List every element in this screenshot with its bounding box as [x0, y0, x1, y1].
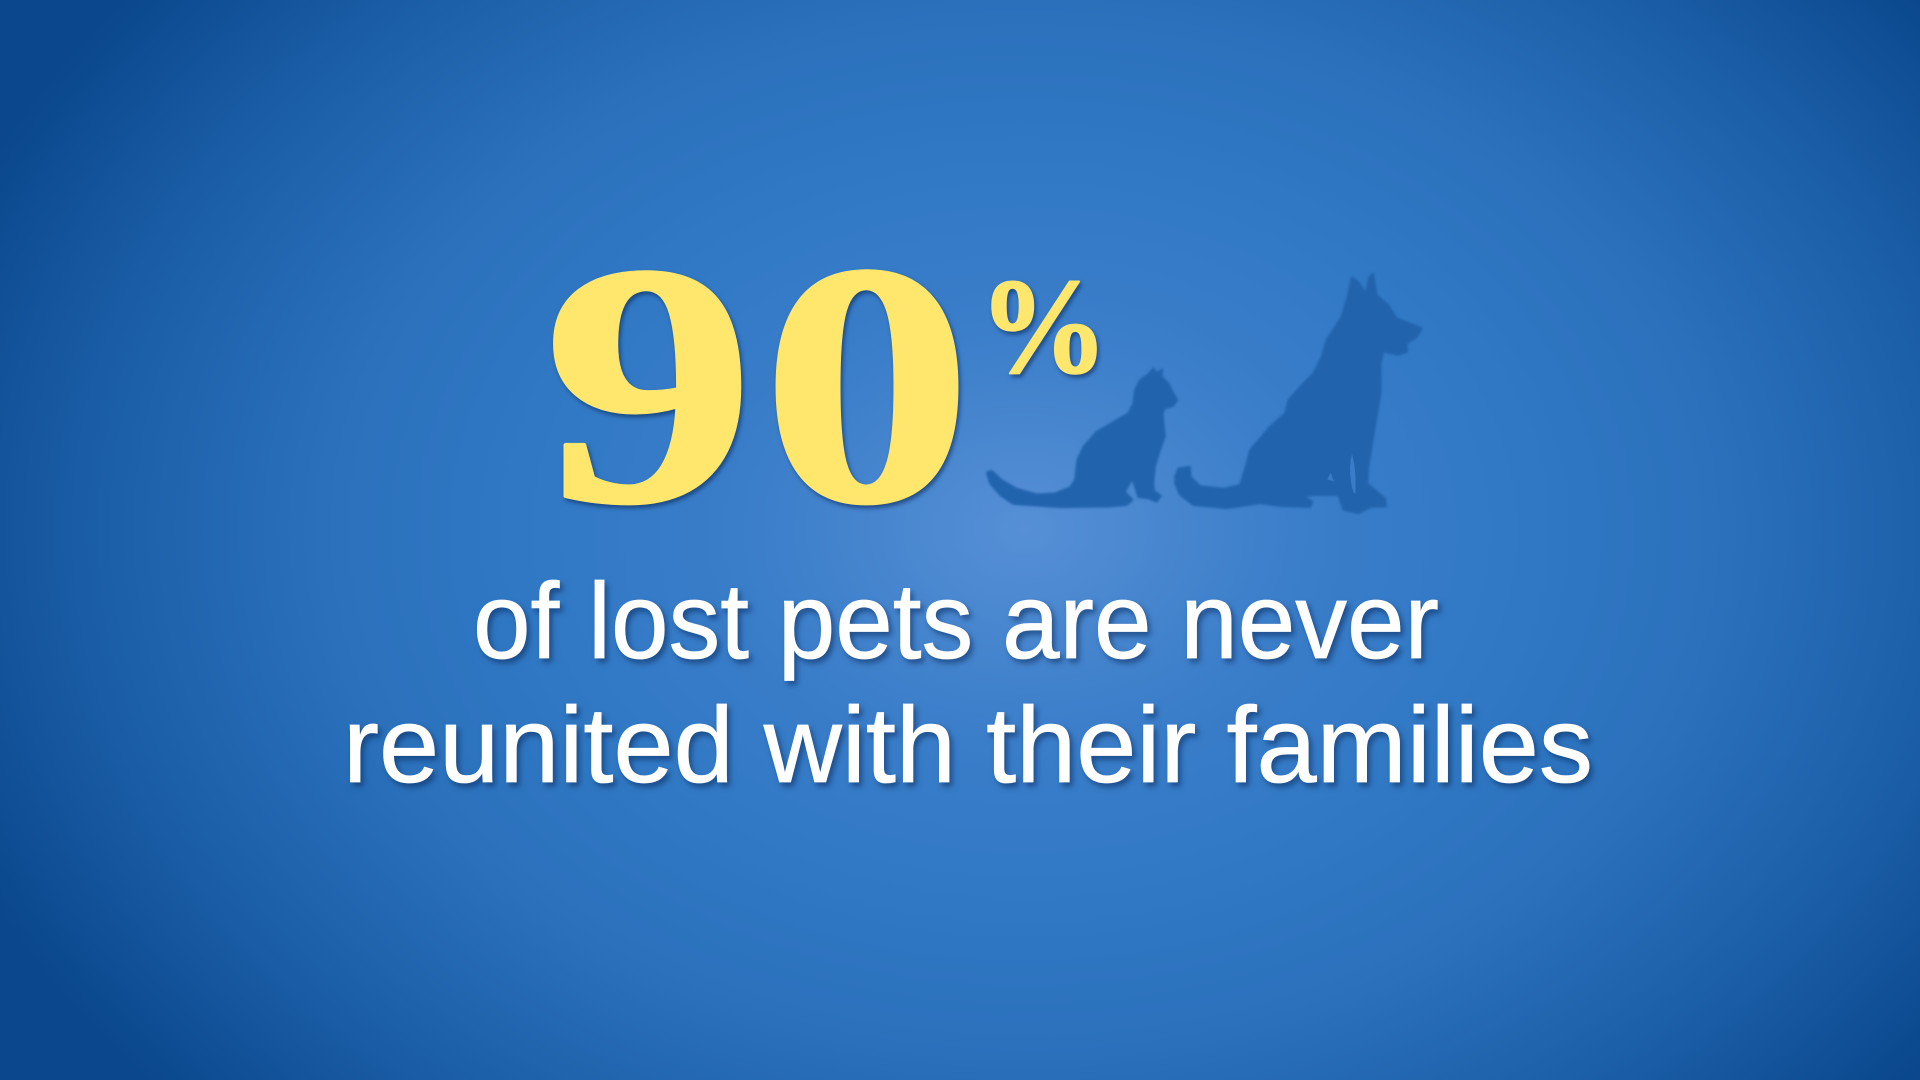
caption: of lost pets are never reunited with their families — [343, 560, 1593, 805]
caption: of lost pets are never reunited with their families: of lost pets are never — [473, 560, 1439, 681]
caption: of lost pets are never reunited with their families: reunited with their families — [343, 684, 1593, 805]
statistic: 90 percent: % — [979, 252, 1108, 402]
statistic: 90 percent — [544, 194, 1108, 575]
icon: dog silhouette — [1175, 273, 1422, 513]
statistic: 90 percent: 9 — [544, 194, 754, 575]
icon: cat silhouette — [987, 368, 1177, 507]
statistic: 90 percent: 0 — [762, 194, 972, 575]
